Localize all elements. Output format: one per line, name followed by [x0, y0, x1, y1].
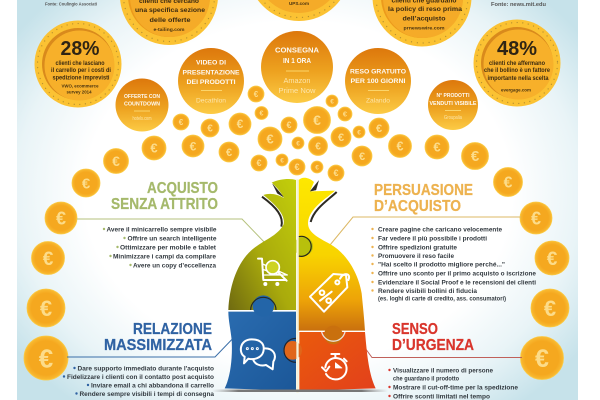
circle: consegna in 1 ora: Prime Now — [278, 86, 316, 95]
circle: offerte con countdown — [116, 78, 168, 132]
coins: falling cluster: € — [376, 123, 382, 135]
coins: falling cluster: € — [359, 151, 365, 163]
text list: senso d'urgenza: che guardano il prodotto — [393, 376, 459, 382]
source note: left: Fonte: Coulingio Associati — [45, 2, 97, 6]
text list: acquisto senza attrito: Minimizzare i campi da compilare — [113, 254, 216, 260]
bag divider — [296, 179, 299, 393]
text list: acquisto senza attrito: Offrire un search intelligente — [128, 236, 217, 242]
circle: numero prodotti venduti: VENDUTI VISIBILE — [430, 101, 477, 107]
text list: acquisto senza attrito: Avere un copy d’eccellenza — [133, 262, 216, 270]
circle: video di presentazione: DEI PRODOTTI — [186, 79, 236, 86]
coins: falling cluster: € — [296, 140, 300, 148]
text list: acquisto senza attrito — [103, 226, 217, 270]
coins: falling cluster: € — [357, 130, 361, 136]
text list: persuasione d'acquisto: Far vedere il più possibile i prodotti — [378, 236, 487, 242]
coins: falling cluster: € — [226, 147, 232, 159]
coins: left arc: € — [82, 176, 91, 192]
puzzle piece: yellow — [299, 178, 365, 331]
text list: relazione massimizzata: Fidelizzare i clienti con il contatto post acquisto — [67, 374, 214, 381]
puzzle piece: blue — [225, 312, 296, 391]
big coin: 28%: 28% — [60, 38, 100, 60]
text list: relazione massimizzata: Dare supporto immediato durante l'acquisto — [78, 366, 214, 372]
circle: numero prodotti venduti — [428, 80, 478, 130]
coins: falling cluster: € — [256, 158, 262, 168]
text list: persuasione d'acquisto: Offrire spedizioni gratuite — [378, 244, 457, 252]
coins: right arc: € — [471, 148, 480, 165]
puzzle piece: olive — [228, 179, 296, 310]
circle: consegna in 1 ora — [261, 31, 333, 103]
big coin: 48%: che il bollino è un fattore — [484, 68, 551, 74]
coins: falling cluster: € — [397, 140, 404, 154]
coins: right arc — [425, 135, 569, 380]
coins: left arc: € — [43, 249, 54, 270]
icon: stopwatch — [322, 354, 347, 379]
text list: senso d'urgenza — [388, 368, 518, 400]
circle: numero prodotti venduti: Groupalia — [444, 115, 462, 121]
icon: chat bubbles — [241, 339, 275, 369]
text list: persuasione d'acquisto: "Hai scelto il prodotto migliore perché..." — [378, 262, 505, 268]
text list: persuasione d'acquisto: Creare pagine che caricano velocemente — [378, 226, 502, 234]
big coin: 48% — [474, 20, 560, 106]
coins: falling cluster: € — [315, 164, 319, 172]
coins: falling cluster: € — [266, 132, 274, 146]
coins: left arc: € — [150, 140, 158, 156]
text list: acquisto senza attrito: Ottimizzare per mobile e tablet — [120, 244, 217, 252]
heading: persuasione d'acquisto — [374, 182, 473, 215]
circle: video di presentazione: PRESENTAZIONE — [182, 70, 240, 76]
text list: relazione massimizzata: Inviare email a chi abbandona il carrello — [91, 382, 214, 390]
circle: reso gratuito: Zalando — [366, 98, 390, 104]
big coin: e-tailing: delle offerte — [150, 18, 191, 24]
coins: falling cluster: € — [254, 90, 259, 99]
circle: reso gratuito — [345, 48, 411, 114]
coins: falling cluster: € — [315, 142, 321, 152]
coins: falling cluster: € — [286, 120, 292, 130]
heading: acquisto senza attrito — [111, 180, 218, 213]
coins: right arc: € — [433, 140, 441, 154]
circle: video di presentazione — [178, 48, 244, 114]
text list: relazione massimizzata — [63, 366, 214, 398]
big coin: 48%: importante nella scelta — [488, 76, 549, 82]
heading: acquisto senza attrito: ACQUISTO — [147, 180, 218, 197]
money bag — [225, 178, 376, 393]
big coin: 48%: evergage.com — [501, 88, 531, 92]
coins: left arc: € — [39, 344, 53, 374]
coins: falling cluster: € — [237, 117, 244, 131]
text list: acquisto senza attrito: Avere il minicarrello sempre visibile — [106, 226, 217, 234]
big coin: 28%: survey 2014 — [66, 90, 92, 94]
big coin: 28%: spedizione imprevisti — [52, 76, 110, 82]
text list: senso d'urgenza: Mostrare il cut-off-time per la spedizione — [393, 384, 518, 392]
coins: left arc — [24, 136, 166, 380]
bag ground shadow — [212, 390, 388, 392]
heading: acquisto senza attrito: SENZA ATTRITO — [111, 196, 218, 213]
coins: falling cluster: € — [313, 112, 321, 128]
text list: relazione massimizzata: Rendere sempre visibili i tempi di consegna — [80, 391, 214, 398]
coins: falling cluster: € — [330, 98, 334, 106]
coins: falling cluster: € — [294, 162, 300, 172]
circle: video di presentazione: Decathlon — [196, 98, 226, 104]
coins: left arc: € — [112, 153, 120, 169]
coins: falling cluster: € — [190, 140, 197, 154]
big coin: e-tailing: e-tailing.com — [154, 27, 184, 32]
text list: senso d'urgenza: Visualizzare il numero di persone — [393, 368, 493, 374]
big coin: prnewswire: prnewswire.com — [404, 26, 444, 30]
big coin: e-tailing: una specifica sezione — [135, 8, 206, 14]
circle: numero prodotti venduti: N° PRODOTTI — [436, 93, 470, 99]
coins: falling cluster: € — [338, 132, 344, 144]
knob: yellow into red — [322, 326, 345, 344]
big coin: 28%: clienti che lasciano — [56, 61, 105, 67]
puzzle piece: red — [299, 332, 376, 391]
heading: persuasione d'acquisto: PERSUASIONE — [374, 182, 473, 199]
coins: right arc: € — [535, 345, 549, 373]
circle: video di presentazione: VIDEO DI — [196, 60, 226, 66]
coins: left arc: € — [56, 208, 66, 228]
coins: falling cluster: € — [207, 124, 213, 134]
coins: falling cluster: € — [280, 158, 284, 164]
heading: persuasione d'acquisto: D’ACQUISTO — [374, 198, 461, 215]
text list: persuasione d'acquisto: Evidenziare il Social Proof e le recensioni dei clienti — [378, 280, 536, 286]
big coin: prnewswire — [372, 0, 472, 46]
circle: offerte con countdown: OFFERTE CON — [124, 94, 160, 100]
coins: right arc: € — [531, 208, 541, 228]
knob: olive into yellow — [294, 236, 313, 256]
coins: falling cluster: € — [179, 118, 184, 127]
big coin: UPS: UPS.com — [289, 1, 309, 6]
big coin: prnewswire: dell’acquisto — [402, 16, 446, 22]
circle: consegna in 1 ora: CONSEGNA — [275, 46, 320, 54]
connector: acquisto senza attrito — [77, 219, 267, 245]
text list: persuasione d'acquisto — [371, 226, 536, 302]
coins: right arc: € — [504, 174, 513, 192]
coins: falling cluster: € — [333, 168, 339, 178]
circle: consegna in 1 ora: Amazon — [284, 76, 310, 85]
bag ear shadows — [262, 181, 337, 227]
heading: senso d'urgenza: SENSO — [392, 321, 438, 338]
circle: offerte con countdown: COUNTDOWN — [124, 102, 160, 108]
connector: senso d'urgenza — [365, 348, 522, 358]
text list: persuasione d'acquisto: Rendere visibili bollini di fiducia — [378, 288, 477, 295]
circle: offerte con countdown: hotels.com — [132, 116, 152, 122]
coins: falling cluster: € — [260, 110, 264, 118]
heading: senso d'urgenza — [392, 321, 474, 354]
heading: relazione massimizzata — [104, 321, 212, 354]
big coin: prnewswire: la policy di reso prima — [388, 7, 463, 13]
icon: shopping cart — [258, 259, 287, 285]
text list: persuasione d'acquisto: Promuovere il reso facile — [378, 253, 454, 260]
connector: relazione massimizzata — [67, 330, 241, 357]
text list: persuasione d'acquisto: (es. loghi di carte di credito, ass. consumatori) — [378, 296, 506, 302]
big coin: 48%: 48% — [497, 38, 537, 60]
text list: persuasione d'acquisto: Offrire uno sconto per il primo acquisto o iscrizione — [378, 270, 536, 278]
big coin: 28%: VWO, ecommerce — [62, 84, 99, 88]
heading: relazione massimizzata: MASSIMIZZATA — [104, 337, 212, 354]
coins: left arc: € — [40, 296, 52, 321]
connector: persuasione d'acquisto — [330, 217, 521, 245]
coins: right arc: € — [547, 249, 558, 270]
big coin: 28% — [34, 20, 122, 108]
coins: falling cluster — [173, 86, 412, 181]
source note: right: Fonte: news.mit.edu — [491, 2, 546, 8]
circle: consegna in 1 ora: IN 1 ORA — [283, 56, 311, 65]
icon: discount tag — [310, 274, 349, 312]
big coin: 48%: clienti che affermano — [489, 61, 545, 67]
big coin: UPS — [248, 0, 350, 21]
coins: falling cluster: € — [343, 110, 348, 118]
circle: reso gratuito: RESO GRATUITO — [350, 68, 406, 76]
circle: reso gratuito: PER 100 GIORNI — [350, 78, 406, 85]
big coin: e-tailing — [120, 0, 218, 45]
knob: blue into olive — [251, 295, 276, 317]
heading: relazione massimizzata: RELAZIONE — [133, 321, 212, 338]
coins: right arc: € — [544, 296, 556, 321]
knob: red into blue — [283, 338, 302, 362]
big coin: 28%: il carrello per i costi di — [51, 68, 111, 74]
heading: senso d'urgenza: D’URGENZA — [392, 337, 474, 354]
